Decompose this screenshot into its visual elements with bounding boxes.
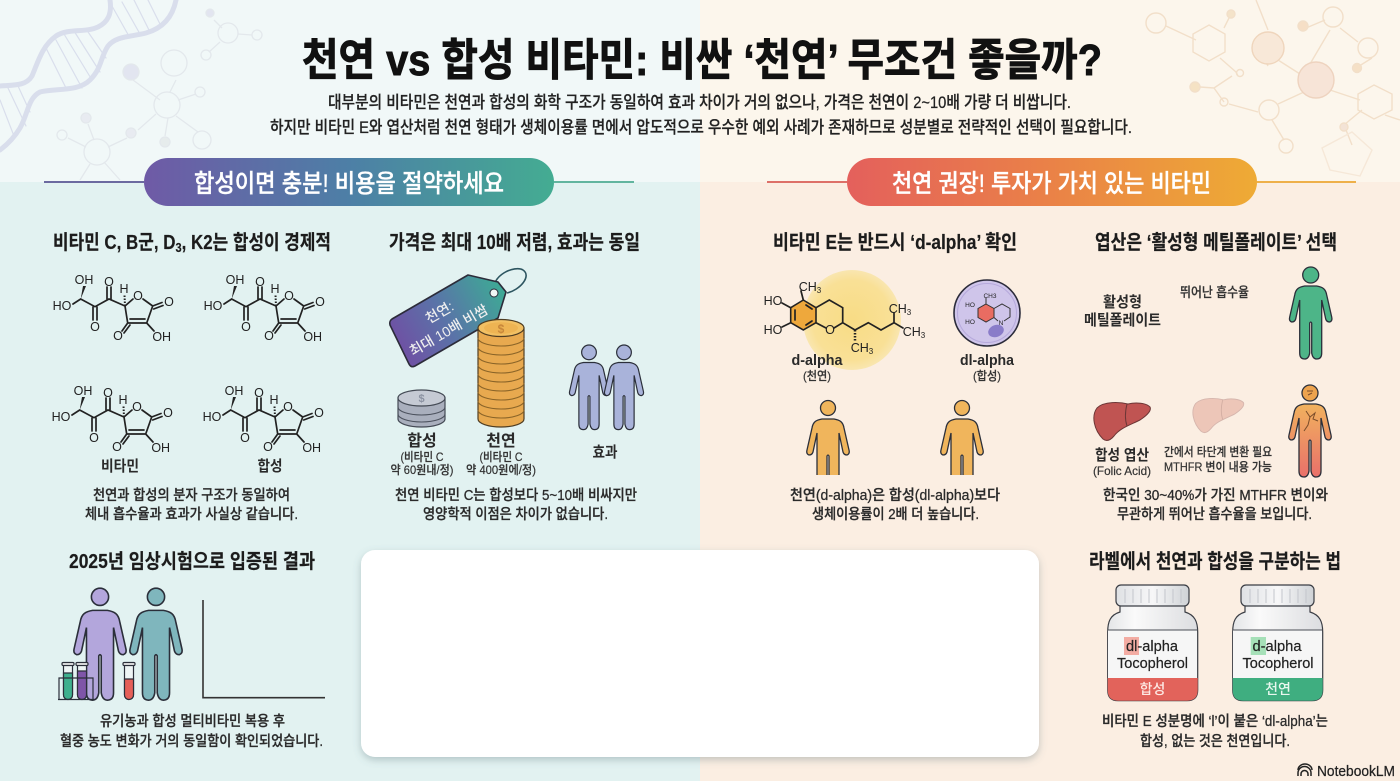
molecule label: vitamin: 비타민: [101, 458, 139, 475]
molecule: vitamin C top right: OH: [303, 330, 322, 344]
label: excellent absorption: 뛰어난 흡수율: [1180, 284, 1249, 300]
molecule: d-alpha tocopherol: 3: [869, 347, 874, 356]
molecule: vitamin C bottom left: O: [103, 386, 113, 400]
caption: 천연과 합성의 분자 구조가 동일하여: [93, 487, 290, 504]
molecule: d-alpha tocopherol: 3: [817, 286, 822, 295]
section header: natural: 천연 권장! 투자가 가치 있는 비타민: [892, 170, 1211, 198]
label: active methylfolate: 메틸폴레이트: [1084, 312, 1161, 329]
section header: natural: [767, 158, 1356, 206]
section header: synthetic: 합성이면 충분! 비용을 절약하세요: [194, 170, 504, 198]
caption: 생체이용률이 2배 더 높습니다.: [812, 506, 979, 523]
heading: 가격은 최대 10배 저렴, 효과는 동일: [389, 231, 640, 254]
heading: 비타민 E는 반드시 ‘d-alpha’ 확인: [773, 231, 1017, 254]
molecule: vitamin C top right: O: [241, 320, 251, 334]
decoration: left molecule network: [57, 9, 262, 180]
heading: 3: [175, 240, 182, 255]
icon: gold coin stack: [478, 320, 524, 427]
molecule: d-alpha tocopherol: 3: [921, 331, 926, 340]
icon: gold coin stack: $: [498, 322, 505, 336]
molecule: vitamin C top left: OH: [152, 330, 171, 344]
molecule: vitamin C top left: O: [104, 275, 114, 289]
icon: price tag: 천연:: [423, 298, 456, 326]
label: dl-alpha: (합성): [973, 368, 1001, 383]
molecule: vitamin C top left: H: [119, 282, 129, 296]
molecule: d-alpha tocopherol: CH: [889, 302, 907, 316]
panel: economical vitamins: [52, 231, 331, 523]
caption: [85, 487, 298, 523]
label: liver conversion note: [1164, 445, 1272, 474]
icon: synthetic bottle: Tocopherol: [1117, 656, 1188, 672]
caption: 영양학적 이점은 차이가 없습니다.: [423, 506, 608, 523]
molecule: vitamin C top left: HO: [53, 299, 72, 313]
molecule: vitamin C bottom right: O: [263, 440, 273, 454]
molecule: vitamin C top right: [204, 273, 325, 344]
label: d-alpha: [792, 352, 843, 383]
icon: price tag: [390, 269, 526, 367]
icon: natural bottle: 천연: [1265, 681, 1291, 697]
icon: two people: [569, 345, 644, 430]
label: synthetic folate: (Folic Acid): [1093, 464, 1151, 478]
label: effect: 효과: [592, 444, 618, 461]
icon: dl-alpha in circle: HO: [965, 319, 975, 326]
icon: price tag: 최대 10배 비쌈: [406, 301, 491, 359]
molecule: vitamin C top right: OH: [226, 273, 244, 287]
caption: 천연 비타민 C는 합성보다 5~10배 비싸지만: [395, 487, 637, 504]
molecule: vitamin C top left: O: [133, 289, 143, 303]
molecule: vitamin C bottom right: H: [269, 393, 279, 407]
molecule: d-alpha tocopherol: HO: [764, 323, 783, 337]
decoration: right molecule network: [1146, 0, 1400, 176]
molecule: d-alpha tocopherol: HO: [764, 294, 783, 308]
icon: natural bottle: [1233, 585, 1323, 701]
caption: 천연(d-alpha)은 합성(dl-alpha)보다: [790, 487, 1000, 504]
heading: , K2는 합성이 경제적: [182, 231, 331, 254]
icon: teal person: [130, 588, 182, 700]
label: d-alpha: (천연): [803, 368, 831, 383]
label: synthetic price: 약 60원내/정): [390, 463, 454, 477]
caption: 무관하게 뛰어난 흡수율을 보입니다.: [1117, 506, 1312, 523]
label: active methylfolate: [1084, 294, 1161, 329]
panel: price vs effect: [389, 231, 644, 523]
panel: reading labels: [1089, 550, 1341, 750]
molecule: vitamin C bottom left: O: [132, 400, 142, 414]
icon: green person: [1289, 267, 1332, 359]
icon: liver faded: [1193, 398, 1244, 433]
molecule: vitamin C top right: HO: [204, 299, 223, 313]
molecule: vitamin C bottom right: [203, 384, 324, 455]
panel: clinical trial: [58, 550, 325, 750]
icon: liver dark: [1094, 403, 1150, 440]
label: dl-alpha: dl-alpha: [960, 352, 1015, 369]
icon: dl-alpha in circle: N: [999, 320, 1004, 327]
molecule: d-alpha tocopherol: 3: [907, 308, 912, 317]
caption: 한국인 30~40%가 가진 MTHFR 변이와: [1103, 487, 1328, 504]
icon: person natural: [806, 400, 850, 475]
molecule: vitamin C bottom right: O: [240, 431, 250, 445]
label: synthetic folate: 합성 엽산: [1095, 447, 1149, 464]
caption: [790, 487, 1000, 523]
icon: synthetic bottle: dl-alpha: [1126, 639, 1179, 655]
molecule label: synthetic: 합성: [258, 458, 282, 475]
molecule: d-alpha tocopherol: CH: [799, 280, 817, 294]
heading: 엽산은 ‘활성형 메틸폴레이트’ 선택: [1095, 231, 1337, 254]
caption: [60, 713, 323, 750]
molecule: d-alpha tocopherol: CH: [903, 325, 921, 339]
molecule: vitamin C bottom right: OH: [225, 384, 243, 398]
molecule: vitamin C top right: O: [264, 329, 274, 343]
icon: natural bottle: Tocopherol: [1242, 656, 1314, 672]
title: 천연 vs 합성 비타민: 비싼 ‘천연’ 무조건 좋을까?: [302, 36, 1102, 85]
molecule: vitamin C bottom left: O: [163, 406, 173, 420]
molecule: vitamin C top right: O: [284, 289, 294, 303]
label: liver conversion note: 간에서 타단계 변환 필요: [1164, 445, 1272, 459]
molecule: vitamin C top left: O: [164, 295, 174, 309]
molecule: d-alpha tocopherol: [764, 280, 926, 356]
caption: [1102, 713, 1328, 750]
icon: natural bottle: d-alpha: [1252, 639, 1302, 655]
caption: 혈중 농도 변화가 거의 동일함이 확인되었습니다.: [60, 733, 323, 750]
panel: vitamin E: [764, 231, 1020, 523]
molecule: vitamin C top left: O: [113, 329, 123, 343]
icon: person synthetic: [940, 400, 984, 475]
molecule: vitamin C bottom left: H: [118, 393, 128, 407]
chart: empty axes: [203, 600, 325, 698]
icon: dl-alpha in circle: [954, 280, 1020, 346]
molecule: vitamin C bottom right: HO: [203, 410, 222, 424]
icon: silver coin stack: [398, 390, 445, 427]
molecule: d-alpha tocopherol: O: [825, 323, 835, 337]
icon: purple person: [74, 588, 126, 700]
icon: dl-alpha in circle: HO: [965, 302, 975, 309]
caption: 유기농과 합성 멀티비타민 복용 후: [100, 713, 285, 730]
label: dl-alpha: [960, 352, 1015, 383]
molecule: vitamin C bottom left: O: [112, 440, 122, 454]
molecule: vitamin C bottom right: O: [254, 386, 264, 400]
panel: folate: [1084, 231, 1337, 523]
molecule: vitamin C bottom left: HO: [52, 410, 71, 424]
label: natural price: 약 400원에/정): [466, 463, 536, 477]
molecule: vitamin C bottom right: O: [314, 406, 324, 420]
intro text: 하지만 비타민 E와 엽산처럼 천연 형태가 생체이용률 면에서 압도적으로 우수한 예외 사례가 존재하므로 성분별로 전략적인 선택이 필요합니다.: [270, 118, 1132, 137]
intro text: [270, 93, 1132, 137]
label: synthetic price: [390, 432, 454, 477]
molecule: vitamin C top left: O: [90, 320, 100, 334]
section header: synthetic: [44, 158, 634, 206]
heading: 2025년 임상시험으로 입증된 결과: [69, 550, 315, 573]
icon: dl-alpha in circle: CH3: [983, 293, 997, 300]
molecule: vitamin C top left: [53, 273, 174, 344]
logo: NotebookLM: NotebookLM: [1317, 764, 1395, 780]
icon: synthetic bottle: [1108, 585, 1198, 701]
caption: [1103, 487, 1328, 523]
molecule: vitamin C bottom right: O: [283, 400, 293, 414]
molecule: vitamin C bottom right: OH: [302, 441, 321, 455]
label: synthetic price: (비타민 C: [400, 450, 444, 464]
label: liver conversion note: MTHFR 변이 내용 가능: [1164, 460, 1272, 474]
label: natural price: 천연: [486, 432, 516, 450]
decoration: DNA helix: [0, 0, 176, 150]
label: synthetic folate: [1093, 447, 1151, 478]
molecule: vitamin C top right: H: [270, 282, 280, 296]
label: synthetic price: 합성: [407, 432, 437, 450]
molecule: vitamin C top left: OH: [75, 273, 93, 287]
icon: synthetic bottle: 합성: [1140, 681, 1165, 697]
molecule: vitamin C top right: O: [315, 295, 325, 309]
caption: [395, 487, 637, 523]
heading: 비타민 C, B군, D: [53, 232, 198, 254]
panel: blank white card: [361, 550, 1039, 757]
molecule: vitamin C bottom left: [52, 384, 173, 455]
icon: test tubes: [58, 662, 135, 700]
caption: 합성, 없는 것은 천연입니다.: [1140, 733, 1290, 750]
intro text: 대부분의 비타민은 천연과 합성의 화학 구조가 동일하여 효과 차이가 거의 없으나, 가격은 천연이 2~10배 가량 더 비쌉니다.: [328, 93, 1071, 112]
molecule: vitamin C top right: O: [255, 275, 265, 289]
label: natural price: [466, 432, 536, 477]
molecule: vitamin C bottom left: O: [89, 431, 99, 445]
molecule: d-alpha tocopherol: CH: [851, 341, 869, 355]
highlight: yellow glow: [803, 270, 901, 370]
heading: 라벨에서 천연과 합성을 구분하는 법: [1089, 550, 1341, 573]
label: d-alpha: d-alpha: [792, 352, 843, 369]
caption: 비타민 E 성분명에 ‘l’이 붙은 ‘dl-alpha’는: [1102, 713, 1328, 730]
molecule: vitamin C bottom left: OH: [151, 441, 170, 455]
label: natural price: (비타민 C: [480, 450, 523, 464]
label: active methylfolate: 활성형: [1103, 294, 1142, 311]
icon: silver coin stack: $: [418, 393, 425, 405]
caption: 체내 흡수율과 효과가 사실상 같습니다.: [85, 506, 298, 523]
icon: stressed person: [1289, 385, 1331, 477]
molecule: vitamin C bottom left: OH: [74, 384, 92, 398]
